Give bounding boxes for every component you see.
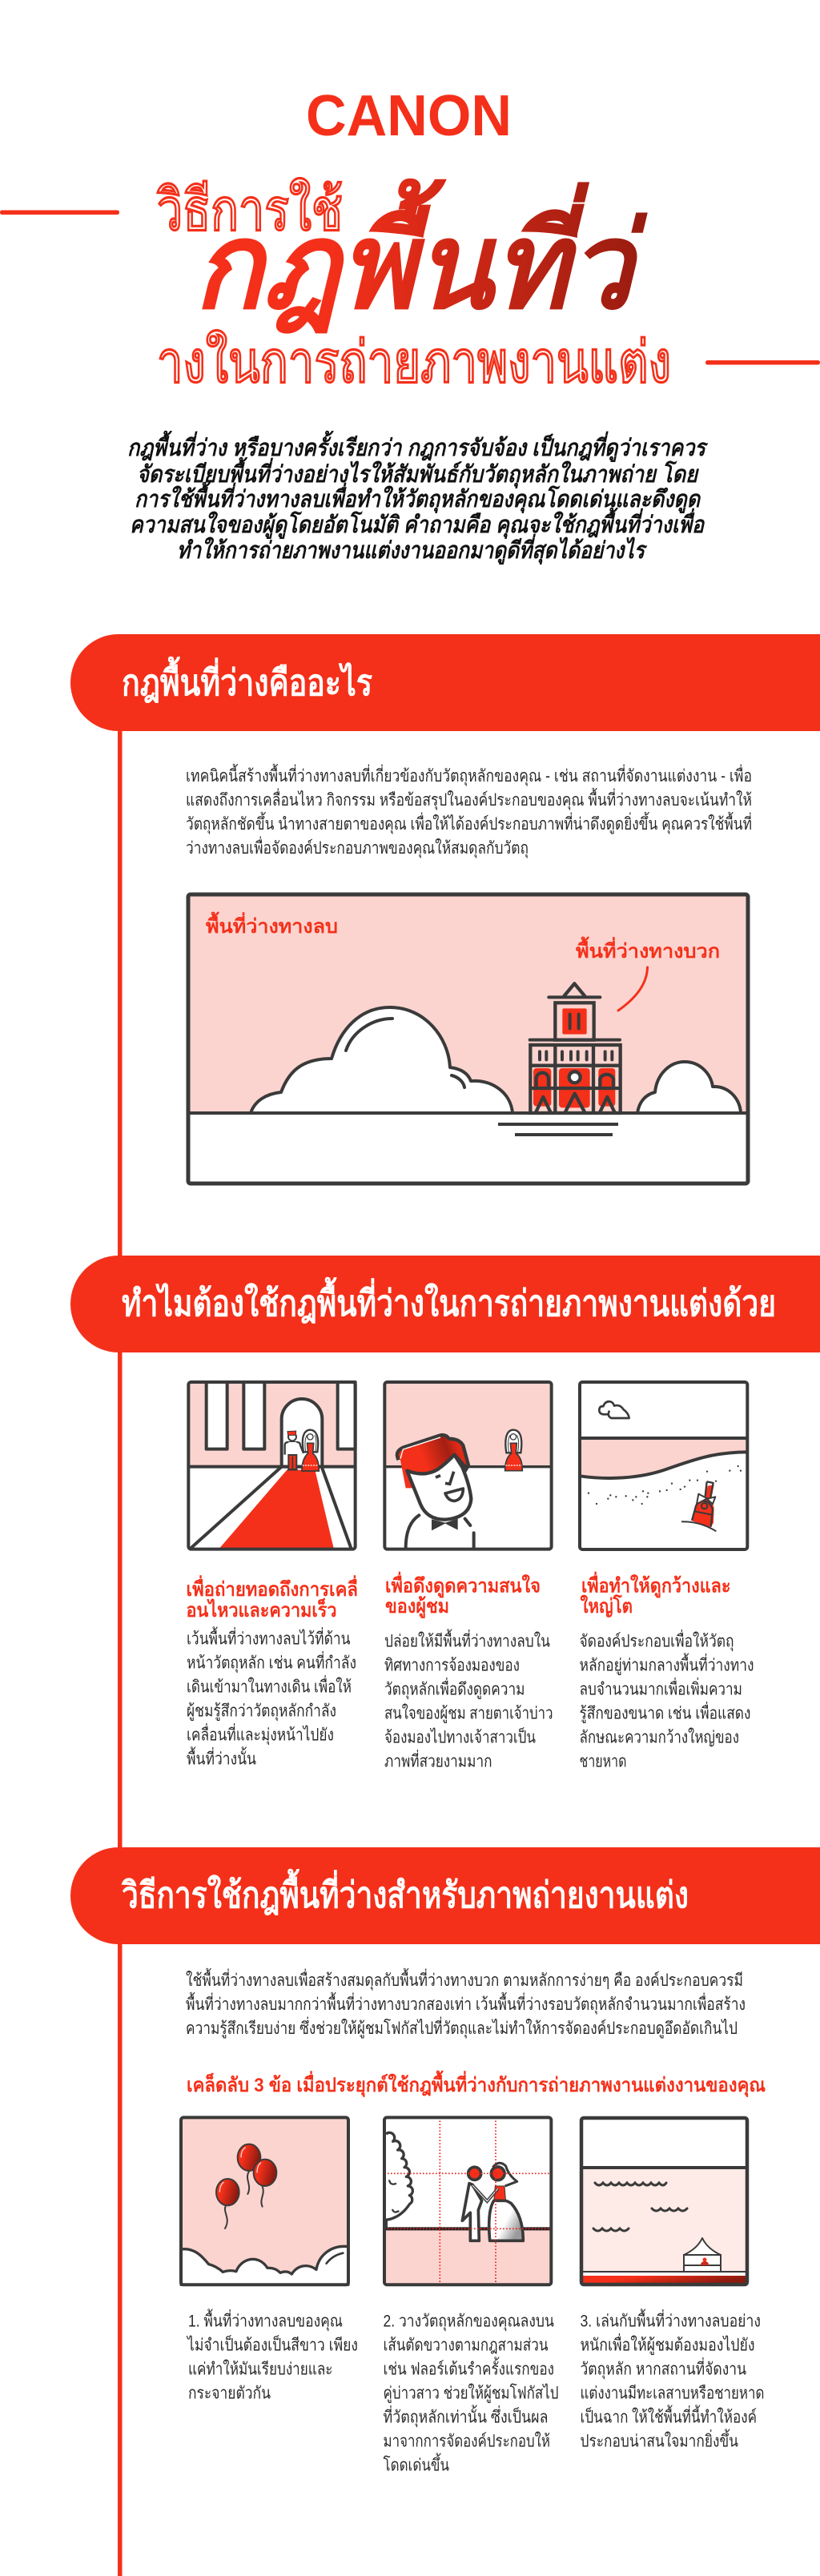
body text: ลักษณะความกว้างใหญ่ของ bbox=[580, 1728, 739, 1747]
body text: จัดองค์ประกอบเพื่อให้วัตถุ bbox=[580, 1629, 734, 1651]
balloon strings bbox=[225, 2172, 263, 2228]
intro paragraph: กฎพื้นที่ว่าง หรือบางครั้งเรียกว่า กฎการจับจ้อง เป็นกฎที่ดูว่าเราควร bbox=[127, 430, 709, 463]
couple bbox=[462, 2163, 523, 2240]
body text: หลักอยู่ท่ามกลางพื้นที่ว่างทาง bbox=[580, 1653, 754, 1675]
body text: รู้สึกของขนาด เช่น เพื่อแสดง bbox=[580, 1701, 751, 1723]
section 1 paragraph bbox=[186, 764, 752, 858]
tip 2 text bbox=[383, 2313, 559, 2474]
body text: วัตถุหลักเพื่อดึงดูดความ bbox=[384, 1677, 525, 1699]
label: positive space: พื้นที่ว่างทางบวก bbox=[576, 936, 720, 962]
body text: ชายหาด bbox=[580, 1752, 626, 1771]
section header 1 bbox=[70, 634, 820, 731]
body text: จ้องมองไปทางเจ้าสาวเป็น bbox=[384, 1726, 536, 1747]
title block bbox=[0, 84, 820, 395]
tip 1 text bbox=[186, 2309, 358, 2402]
panel: movement illustration bbox=[188, 1382, 356, 1549]
heading: เพื่อดึงดูดความสนใจ bbox=[385, 1571, 541, 1598]
section header 1: กฎพื้นที่ว่างคืออะไร bbox=[122, 656, 372, 703]
title line 1 outlined: วิธีการใช้ bbox=[156, 176, 343, 243]
heading bbox=[385, 1571, 541, 1618]
body text: สนใจของผู้ชม สายตาเจ้าบ่าว bbox=[384, 1704, 553, 1723]
tip 2 text: 2. วางวัตถุหลักของคุณลงบน bbox=[383, 2313, 554, 2332]
heading: เพื่อถ่ายทอดถึงการเคลื่ bbox=[186, 1575, 358, 1601]
tip 2 text: เส้นตัดขวางตามกฎสามส่วน bbox=[383, 2337, 548, 2354]
column 1: movement bbox=[186, 1575, 358, 1768]
heading: อนไหวและความเร็ว bbox=[186, 1597, 336, 1622]
section header 2 bbox=[70, 1256, 820, 1352]
callout curve bbox=[618, 967, 647, 1011]
section 1 paragraph: ว่างทางลบเพื่อจัดองค์ประกอบภาพของคุณให้สมดุลกับวัตถุ bbox=[186, 836, 529, 858]
section header 3: วิธีการใช้กฎพื้นที่ว่างสำหรับภาพถ่ายงานแต่ง bbox=[121, 1868, 689, 1915]
tips heading: เคล็ดลับ 3 ข้อ เมื่อประยุกต์ใช้กฎพื้นที่ว่างกับการถ่ายภาพงานแต่งงานของคุณ bbox=[187, 2070, 766, 2098]
body text: หน้าวัตถุหลัก เช่น คนที่กำลัง bbox=[187, 1651, 356, 1674]
big cloud bbox=[251, 1007, 512, 1113]
body text: ลบจำนวนมากเพื่อเพิ่มความ bbox=[580, 1677, 742, 1699]
vertical red timeline bbox=[118, 731, 122, 2576]
tip 3 text: ประกอบน่าสนใจมากยิ่งขึ้น bbox=[580, 2429, 738, 2450]
title line 3 outlined: างในการถ่ายภาพงานแต่ง bbox=[157, 328, 671, 395]
wedding tent bbox=[684, 2238, 721, 2272]
left accent line bbox=[0, 210, 119, 215]
tip 3 text: หนักเพื่อให้ผู้ชมต้องมองไปยัง bbox=[580, 2333, 754, 2356]
column 3: wide bbox=[580, 1571, 754, 1771]
tip 3 text: เป็นฉาก ให้ใช้พื้นที่นี้ทำให้องค์ bbox=[580, 2405, 757, 2426]
tip 3 text: แต่งงานมีทะเลสาบหรือชายหาด bbox=[580, 2385, 764, 2402]
tip 1 text: 1. พื้นที่ว่างทางลบของคุณ bbox=[188, 2309, 343, 2332]
tip 3 text bbox=[580, 2309, 764, 2450]
section 3 paragraph bbox=[186, 1968, 746, 2039]
heading bbox=[186, 1575, 358, 1622]
panel: balloons illustration bbox=[181, 2117, 348, 2285]
panel: lake tent illustration bbox=[581, 2118, 747, 2285]
intro paragraph: ทำให้การถ่ายภาพงานแต่งงานออกมาดูดีที่สุดได้อย่างไร bbox=[177, 533, 648, 565]
section header 3 bbox=[70, 1847, 820, 1944]
tip 1 text: ไม่จำเป็นต้องเป็นสีขาว เพียง bbox=[186, 2333, 358, 2354]
icon: church bbox=[530, 983, 621, 1113]
panel: rule of thirds illustration bbox=[384, 2117, 551, 2285]
panel: attention illustration bbox=[384, 1382, 552, 1549]
tree bbox=[386, 2132, 412, 2220]
body text: ภาพที่สวยงามมาก bbox=[384, 1749, 492, 1771]
diagram: negative and positive space bbox=[188, 894, 748, 1184]
body text bbox=[580, 1629, 754, 1771]
tip 2 text: เช่น ฟลอร์เต้นรำครั้งแรกของ bbox=[383, 2357, 554, 2378]
tip 1 text: กระจายตัวกัน bbox=[188, 2385, 271, 2402]
heading: ของผู้ชม bbox=[385, 1596, 449, 1618]
label: negative space: พื้นที่ว่างทางลบ bbox=[206, 911, 338, 938]
brand logo: CANON: CANON bbox=[306, 84, 512, 148]
tip 1 text: แค่ทำให้มันเรียบง่ายและ bbox=[188, 2359, 333, 2378]
tip 3 text: 3. เล่นกับพื้นที่ว่างทางลบอย่าง bbox=[580, 2309, 761, 2330]
intro paragraph: จัดระเบียบพื้นที่ว่างอย่างไรให้สัมพันธ์กับวัตถุหลักในภาพถ่าย โดย bbox=[137, 456, 700, 489]
intro paragraph: ความสนใจของผู้ดูโดยอัตโนมัติ คำถามคือ คุณจะใช้กฎพื้นที่ว่างเพื่อ bbox=[130, 507, 705, 540]
tip 2 text: โดดเด่นขึ้น bbox=[383, 2453, 449, 2474]
title main gradient: กฎพื้นที่ว่ bbox=[194, 178, 648, 334]
right accent line bbox=[705, 360, 820, 365]
heading: เพื่อทำให้ดูกว้างและ bbox=[581, 1571, 730, 1598]
intro paragraph: การใช้พื้นที่ว่างทางลบเพื่อทำให้วัตถุหลักของคุณโดดเด่นและดึงดูด bbox=[135, 481, 701, 514]
heading bbox=[580, 1571, 730, 1618]
water ripples bbox=[593, 2183, 687, 2231]
balloons bbox=[216, 2144, 276, 2205]
column 2: attention bbox=[384, 1571, 553, 1771]
tip 2 text: ที่วัตถุหลักเท่านั้น ซึ่งเป็นผล bbox=[383, 2405, 548, 2428]
small cloud bbox=[637, 1062, 741, 1113]
body text: พื้นที่ว่างนั้น bbox=[187, 1747, 256, 1768]
body text bbox=[384, 1629, 553, 1771]
ground line and reflections bbox=[188, 1113, 748, 1135]
body text: ปล่อยให้มีพื้นที่ว่างทางลบใน bbox=[384, 1629, 550, 1651]
body text: เคลื่อนที่และมุ่งหน้าไปยัง bbox=[187, 1723, 334, 1746]
heading: ใหญ่โต bbox=[580, 1594, 633, 1618]
body text bbox=[187, 1627, 356, 1768]
tip 2 text: มาจากการจัดองค์ประกอบให้ bbox=[383, 2431, 550, 2450]
body text: เดินเข้ามาในทางเดิน เพื่อให้ bbox=[187, 1675, 352, 1696]
tip 3 text: วัตถุหลัก หากสถานที่จัดงาน bbox=[580, 2357, 746, 2380]
body text: ทิศทางการจ้องมองของ bbox=[384, 1656, 520, 1675]
panel: wide beach illustration bbox=[580, 1382, 747, 1549]
body text: เว้นพื้นที่ว่างทางลบไว้ที่ด้าน bbox=[187, 1627, 351, 1648]
intro paragraph bbox=[127, 430, 709, 565]
rule of thirds grid bbox=[384, 2117, 551, 2285]
body text: ผู้ชมรู้สึกว่าวัตถุหลักกำลัง bbox=[187, 1702, 336, 1722]
tip 2 text: คู่บ่าวสาว ช่วยให้ผู้ชมโฟกัสไป bbox=[383, 2383, 559, 2404]
